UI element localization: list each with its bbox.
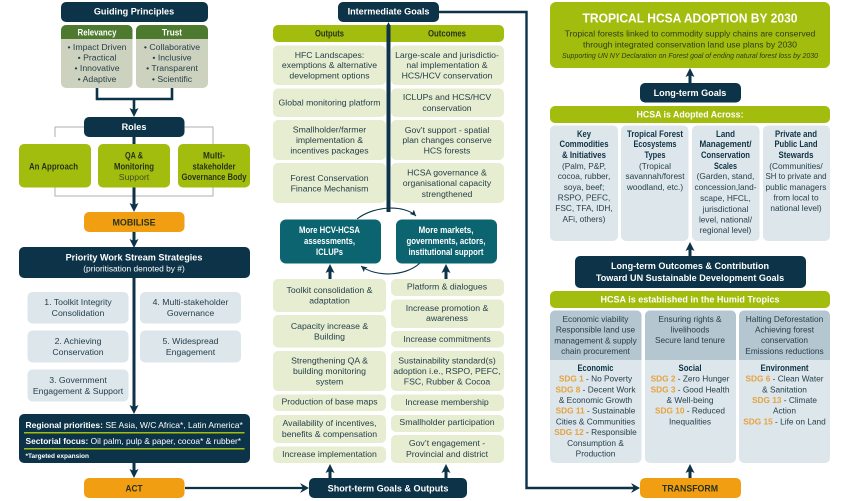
role: QA and monitoring: QA & (125, 150, 143, 160)
panel: land management scales: Scales (714, 161, 737, 171)
panel: land management scales: (Garden, stand, (697, 171, 754, 181)
panel: key commodities: AFi, others) (563, 214, 606, 224)
role: QA and monitoring: Support (119, 172, 150, 182)
outcomes column: ICLUPs and HCS/HCV (403, 92, 491, 102)
panel: environment: SDG 15 - Life on Land (743, 416, 826, 426)
title panel: tropical HCSA adoption by 2030: TROPICAL HCSA ADOPTION BY 2030 (582, 12, 798, 26)
heading: priority work stream strategies (19, 247, 250, 278)
title panel: tropical HCSA adoption by 2030: Supporting UN NY Declaration on Forest goal of ending natural forest loss by 2030 (562, 53, 818, 60)
heading: long-term outcomes: Toward UN Sustainable Development Goals (596, 273, 784, 283)
panel: economic: chain procurement (561, 346, 631, 356)
panel: economic: Responsible land use (556, 324, 636, 334)
panel: relevancy: Relevancy (78, 28, 117, 38)
heading: long-term outcomes: Long-term Outcomes & Contribution (611, 261, 769, 271)
outputs column: Forest Conservation (290, 173, 369, 183)
short-term left column: Toolkit consolidation & (287, 285, 373, 295)
panel: tropical forest ecosystems: Ecosystems (634, 139, 676, 149)
panel: key commodities: (Palm, P&P, (562, 161, 606, 171)
panel: tropical forest ecosystems: savannah/forest (625, 171, 685, 181)
heading: intermediate goals (338, 2, 439, 22)
title panel: tropical HCSA adoption by 2030: Tropical forests linked to commodity supply chains are conserved (565, 28, 816, 38)
short-term right column: Increase promotion & (406, 303, 488, 313)
panel: economic: Consumption & (567, 438, 624, 448)
role: governance body (178, 144, 250, 188)
panel: environment (739, 310, 830, 463)
short-term left column: benefits & compensation (282, 429, 377, 439)
outputs column: Finance Mechanism (291, 184, 368, 194)
role: QA and monitoring: Monitoring (114, 162, 154, 172)
heading: long-term goals (640, 83, 741, 102)
role: QA and monitoring (98, 144, 170, 188)
outputs column: implementation & (296, 135, 363, 145)
panel: economic: SDG 12 - Responsible (554, 427, 637, 437)
panel: regional priorities and sectoral focus: Regional priorities: SE Asia, W/C Africa*, Latin America* (26, 420, 243, 430)
panel: relevancy: • Innovative (74, 63, 120, 73)
panel: economic: & Economic Growth (559, 395, 633, 405)
panel: land management scales: Conservation (701, 150, 750, 160)
connector lines (55, 12, 690, 488)
panel: key commodities: RSPO, PEFC, (558, 192, 610, 202)
outputs column: development options (289, 70, 370, 80)
panel: environment: SDG 6 - Clean Water (745, 374, 824, 384)
short-term left column: Production of base maps (281, 396, 378, 406)
heading: short-term goals and outputs (309, 478, 467, 498)
short-term left column: building monitoring (293, 366, 366, 376)
short-term right column: Increase membership (405, 397, 489, 407)
short-term right column: FSC, Rubber & Cocoa (404, 376, 490, 386)
panel: land management scales: regional level) (700, 225, 752, 235)
title panel: tropical HCSA adoption by 2030: through integrated conservation land use plans by 2030 (583, 40, 797, 50)
cycle arrows (357, 208, 420, 274)
header bar: HCSA is adopted across (550, 106, 830, 123)
panel: social: Ensuring rights & (658, 314, 722, 324)
box: more markets: institutional support (408, 247, 484, 258)
panel: trust: • Scientific (152, 74, 193, 84)
strategy 4: 4. Multi-stakeholder (153, 297, 229, 307)
panel: economic: Cities & Communities (556, 416, 635, 426)
panel: economic: Economic viability (563, 314, 629, 324)
outputs column: HFC Landscapes: (295, 50, 364, 60)
panel: key commodities: soya, beef; (564, 182, 604, 192)
panel: land stewards: Private and (775, 129, 817, 139)
panel: regional priorities and sectoral focus: Sectorial focus: Oil palm, pulp & paper, cocoa* & rubber* (26, 436, 242, 446)
strategy 1: Consolidation (52, 308, 104, 318)
panel: environment: Action (773, 406, 796, 416)
strategy 5: Engagement (166, 347, 216, 357)
short-term left column: Strengthening QA & (291, 356, 368, 366)
box: more markets (396, 220, 497, 264)
outcomes column: plan changes conserve (402, 135, 492, 145)
panel: land stewards: public managers (766, 182, 826, 192)
panel: land management scales: Land (716, 129, 735, 139)
strategy 5 (140, 330, 241, 362)
panel: land stewards: national level) (770, 203, 822, 213)
heading: intermediate goals: Intermediate Goals (348, 6, 429, 16)
panel: tropical forest ecosystems: Types (644, 150, 666, 160)
panel: key commodities: & Initiatives (562, 150, 606, 160)
panel: land stewards: from local to (773, 192, 819, 202)
panel: land management scales (692, 126, 760, 241)
outputs column: exemptions & alternative (282, 60, 377, 70)
panel: social: Social (678, 363, 702, 373)
panel: trust: • Collaborative (144, 42, 200, 52)
header bar: established in the humid tropics: HCSA is established in the Humid Tropics (600, 294, 780, 304)
box: more HCV-HCSA assessments (280, 220, 381, 264)
short-term right column: Increase commitments (403, 334, 491, 344)
panel: economic (550, 310, 642, 463)
panel: economic: SDG 11 - Sustainable (556, 406, 636, 416)
box: more markets: More markets, (418, 225, 474, 236)
panel: trust (136, 25, 208, 88)
panel: environment: Achieving forest (755, 324, 815, 334)
panel: land stewards (763, 126, 830, 241)
strategy 2: Conservation (52, 347, 104, 357)
panel: social: SDG 3 - Good Health (651, 384, 730, 394)
panel: land stewards: Stewards (778, 150, 814, 160)
title panel: tropical HCSA adoption by 2030 (550, 2, 830, 68)
outcomes column: conservation (422, 103, 472, 113)
panel: economic: management & supply (554, 336, 638, 346)
short-term right column: Provincial and district (406, 449, 489, 459)
header bar: established in the humid tropics (550, 291, 830, 308)
strategy 2 (28, 330, 128, 362)
panel: land management scales: jurisdictional (702, 204, 748, 214)
box: more HCV-HCSA assessments: More HCV-HCSA (299, 225, 360, 236)
heading: priority work stream strategies: (prioritisation denoted by #) (83, 264, 185, 274)
short-term left column (273, 279, 386, 463)
panel: environment: Emissions reductions (745, 346, 824, 356)
strategy 3: Engagement & Support (33, 386, 124, 396)
panel: regional priorities and sectoral focus (19, 414, 250, 463)
panel: land stewards: SH to private and (766, 171, 827, 181)
label: transform: TRANSFORM (662, 484, 718, 494)
label: transform (640, 478, 741, 498)
role: an approach: An Approach (29, 162, 78, 172)
short-term right column: Gov’t engagement - (409, 438, 485, 448)
panel: key commodities: Commodities (560, 139, 608, 149)
panel: economic: SDG 8 - Decent Work (555, 384, 636, 394)
panel: land management scales: level, national/ (699, 214, 753, 224)
outcomes column: HCS forests (424, 146, 471, 156)
panel: social: & Well-being (667, 395, 714, 405)
panel: key commodities: cocoa, rubber, (558, 171, 610, 181)
arrowheads (130, 22, 694, 493)
panel: environment: & Sanitation (762, 384, 807, 394)
heading: long-term outcomes (575, 256, 806, 288)
panel: economic: SDG 1 - No Poverty (559, 374, 633, 384)
panel: environment: Halting Deforestation (746, 314, 824, 324)
panel: tropical forest ecosystems: woodland, etc.) (626, 182, 683, 192)
panel: environment: SDG 13 - Climate (752, 395, 817, 405)
outputs column (273, 46, 386, 203)
strategy 2: 2. Achieving (55, 336, 102, 346)
label: act (84, 478, 184, 498)
heading: guiding principles: Guiding Principles (94, 6, 174, 16)
panel: social: Inequalities (669, 416, 711, 426)
panel: tropical forest ecosystems (621, 126, 688, 241)
panel: social: livelihoods (671, 324, 709, 334)
outcomes column: HCS/HCV conservation (402, 70, 493, 80)
panel: relevancy: • Practical (78, 52, 116, 62)
short-term right column: Platform & dialogues (407, 282, 488, 292)
strategy 5: 5. Widespread (162, 336, 219, 346)
short-term left column: adaptation (309, 296, 350, 306)
panel: tropical forest ecosystems: Tropical Forest (627, 129, 683, 139)
header bar: outputs and outcomes: Outputs (315, 28, 344, 38)
panel: environment: Environment (760, 363, 808, 373)
outcomes column: Large-scale and jurisdictio- (395, 50, 499, 60)
panel: social (645, 310, 736, 463)
panel: trust: • Transparent (146, 63, 198, 73)
panel: tropical forest ecosystems: (Tropical (639, 161, 671, 171)
panel: key commodities: FSC, TFA, IDH, (555, 203, 613, 213)
strategy 4 (140, 292, 241, 324)
panel: social: Secure land tenure (655, 335, 725, 345)
panel: relevancy: • Adaptive (78, 74, 117, 84)
panel: regional priorities and sectoral focus: *Targeted expansion (26, 453, 89, 460)
header bar: HCSA is adopted across: HCSA is Adopted Across: (636, 110, 744, 120)
outcomes column: Gov’t support - spatial (405, 125, 489, 135)
short-term right column: Sustainability standard(s) (398, 356, 496, 366)
outcomes column: organisational capacity (403, 178, 492, 188)
panel: key commodities: Key (577, 129, 592, 139)
strategy 1 (28, 292, 128, 324)
strategy 3 (28, 370, 128, 402)
panel: land management scales: concession,land- (694, 182, 757, 192)
short-term right column: adoption i.e., RSPO, PEFC, (393, 366, 501, 376)
label: mobilise: MOBILISE (112, 218, 156, 228)
panel: economic: Production (576, 448, 616, 458)
short-term right column: awareness (426, 313, 469, 323)
panel: economic: Economic (578, 363, 614, 373)
box: more markets: governments, actors, (406, 236, 486, 247)
panel: environment: conservation (761, 335, 808, 345)
heading: long-term goals: Long-term Goals (654, 88, 726, 98)
short-term left column: Building (314, 332, 345, 342)
outputs column: Smallholder/farmer (293, 124, 366, 134)
panel: relevancy (61, 25, 132, 88)
panel: land management scales: Management/ (700, 139, 752, 149)
panel: social: SDG 2 - Zero Hunger (651, 374, 730, 384)
short-term left column: system (316, 376, 343, 386)
heading: short-term goals and outputs: Short-term Goals & Outputs (328, 484, 448, 494)
outcomes column (391, 46, 504, 203)
short-term right column (391, 279, 504, 463)
strategy 4: Governance (167, 308, 214, 318)
panel: land stewards: Public Land (774, 139, 818, 149)
strategy 3: 3. Government (49, 375, 107, 385)
header bar: outputs and outcomes (273, 25, 504, 42)
role: an approach (19, 144, 91, 188)
box: more HCV-HCSA assessments: assessments, (304, 236, 355, 247)
panel: relevancy: • Impact Driven (67, 42, 127, 52)
outcomes column: nal implementation & (406, 60, 488, 70)
short-term right column: Smallholder participation (399, 417, 495, 427)
role: governance body: Governance Body (182, 172, 247, 182)
panel: land stewards: (Communities/ (769, 161, 823, 171)
panel: key commodities (550, 126, 618, 241)
heading: roles (84, 117, 184, 137)
header bar: outputs and outcomes: Outcomes (428, 28, 466, 38)
outputs column: incentives packages (290, 146, 369, 156)
heading: priority work stream strategies: Priority Work Stream Strategies (66, 252, 202, 262)
panel: trust: Trust (162, 28, 182, 38)
outputs column: Global monitoring platform (279, 98, 380, 108)
role: governance body: stakeholder (192, 162, 236, 172)
outcomes column: strengthened (422, 189, 473, 199)
panel: land management scales: scape, HFCL, (700, 193, 751, 203)
heading: guiding principles (61, 2, 208, 22)
panel: trust: • Inclusive (152, 52, 192, 62)
short-term left column: Capacity increase & (291, 321, 368, 331)
heading: roles: Roles (122, 122, 146, 132)
role: governance body: Multi- (203, 150, 225, 160)
label: act: ACT (126, 484, 143, 494)
strategy 1: 1. Toolkit Integrity (44, 297, 112, 307)
outcomes column: HCSA governance & (407, 168, 487, 178)
short-term left column: Availability of incentives, (282, 418, 377, 428)
label: mobilise (84, 212, 184, 232)
short-term left column: Increase implementation (282, 449, 377, 459)
box: more HCV-HCSA assessments: ICLUPs (316, 247, 343, 258)
panel: social: SDG 10 - Reduced (655, 406, 725, 416)
